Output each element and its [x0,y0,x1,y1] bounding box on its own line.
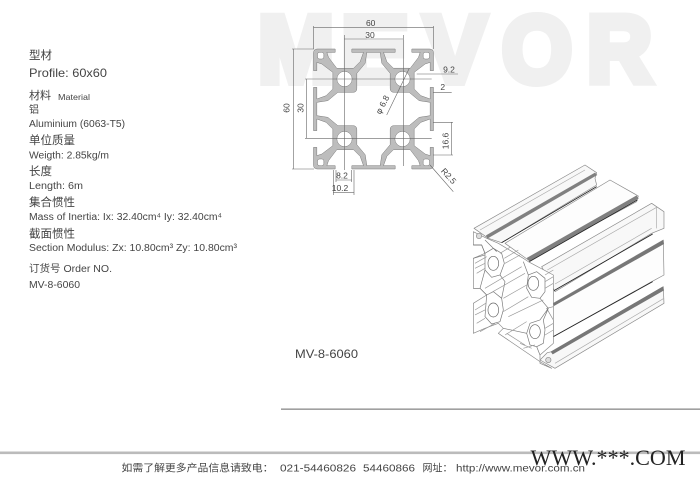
watermark: MEVOR: R [587,0,652,103]
rule under drawing [281,408,700,410]
long faces [474,165,597,243]
footer contact text: http://www.mevor.com.cn [456,464,585,474]
specification text block: Aluminium (6063-T5) [29,119,125,130]
isometric 3D extrusion drawing [473,165,664,368]
profile cross-section drawing [314,49,433,169]
watermark: WWW.***.COM: WWW.***.COM [530,445,686,470]
dimension lines and labels: 10.2 [332,183,349,193]
footer contact text: 网址： [422,462,452,474]
hex bosses and webs [473,240,548,355]
footer contact text: 54460866 [363,464,416,474]
footer contact text: 如需了解更多产品信息请致电： [122,462,274,474]
dimension lines and labels: 30 [296,103,306,113]
specification text block: Mass of Inertia: Ix: 32.40cm⁴ Iy: 32.40cm⁴ [29,212,222,223]
footer contact text: 021-54460826 [280,464,357,474]
dimension lines and labels: R2.5 [439,166,459,186]
dimension lines and labels: 16.6 [440,132,450,149]
dimension lines and labels: 60 [366,18,376,28]
specification text block: Section Modulus: Zx: 10.80cm³ Zy: 10.80cm³ [29,243,238,254]
specification text block: MV-8-6060 [29,280,80,291]
dimension lines and labels: 8.2 [336,170,348,180]
specification text block: 截面惯性 [29,226,75,240]
specification text block: 集合惯性 [29,195,75,209]
dimension lines and labels: 2 [440,82,445,92]
bosses holes [488,256,499,270]
specification text block: 长度 [29,164,52,178]
watermark: MEVOR: O [502,0,572,103]
specification text block [29,48,238,291]
specification text block: 材料 [29,88,51,102]
slot interior lines [475,247,553,348]
dimension lines and labels [282,18,459,195]
product label: MV-8-6060 [295,347,358,361]
dimension lines and labels: φ 6.8 [373,93,392,116]
specification text block: Length: 6m [29,181,83,192]
dimension lines and labels: 30 [365,30,375,40]
specification text block: 型材 [29,48,52,62]
dimension lines and labels: 9.2 [443,65,455,75]
specification text block: 订货号 Order NO. [29,262,112,275]
specification text block: Material [58,92,90,102]
watermark: MEVOR: E [341,0,409,103]
dark strips [486,173,597,239]
specification text block: 铝 [29,104,39,116]
watermark: MEVOR: M [258,0,334,103]
footer rule [0,452,700,454]
watermark: MEVOR [258,0,652,103]
dimension lines and labels: 60 [282,103,292,113]
specification text block: Weigth: 2.85kg/m [29,150,109,162]
watermark: MEVOR: V [424,0,486,103]
footer contact text [122,462,585,474]
specification text block: 单位质量 [29,133,75,147]
front end face [473,232,553,368]
specification text block: Profile: 60x60 [29,66,107,80]
